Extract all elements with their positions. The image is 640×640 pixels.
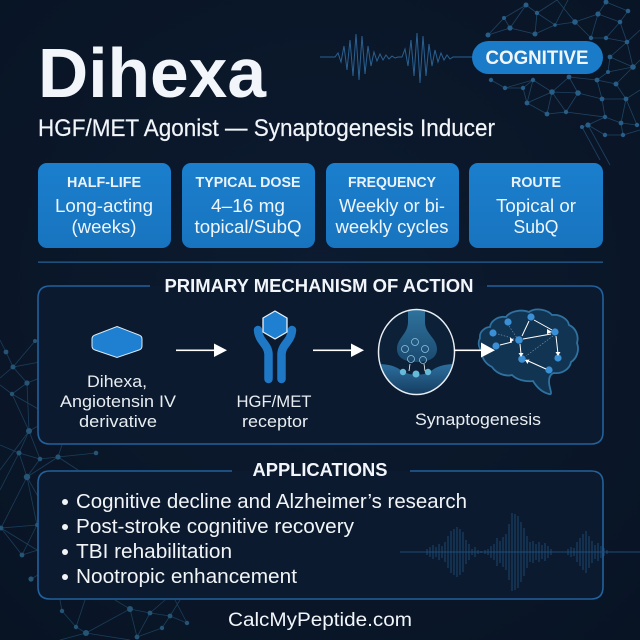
waveform: top <box>320 33 475 83</box>
icon: brain network <box>479 309 578 394</box>
title: Dihexa <box>38 34 267 112</box>
label: Dihexa <box>60 372 177 431</box>
card: route: SubQ <box>514 217 558 237</box>
card: half-life: Long-acting <box>55 196 153 216</box>
list: uses: TBI rehabilitation <box>76 541 232 563</box>
card: frequency <box>326 163 459 248</box>
list: uses: Nootropic enhancement <box>76 566 297 588</box>
card: frequency: Weekly or bi- <box>339 196 445 216</box>
footer: CalcMyPeptide.com <box>228 610 412 631</box>
panel: applications <box>38 460 640 599</box>
card: route: Topical or <box>496 196 576 216</box>
list: uses <box>62 491 467 588</box>
icon: HGF/MET receptor <box>258 311 292 379</box>
card: typical dose: topical/SubQ <box>194 217 302 237</box>
network: bottom left brain <box>0 339 189 640</box>
arrow: to brain <box>454 342 495 358</box>
card: route: ROUTE <box>511 175 561 191</box>
card: half-life: (weeks) <box>72 217 136 237</box>
card: frequency: FREQUENCY <box>348 175 436 191</box>
divider line <box>38 262 603 263</box>
icon: Dihexa hexagon <box>92 326 142 358</box>
list: uses: Cognitive decline and Alzheimer’s research <box>76 491 467 513</box>
list: uses: Post-stroke cognitive recovery <box>76 516 354 538</box>
heading: applications: APPLICATIONS <box>252 460 388 480</box>
label: receptor: receptor <box>242 412 308 431</box>
label: Dihexa: derivative <box>79 412 157 431</box>
label: synaptogenesis: Synaptogenesis <box>415 410 541 429</box>
waveform: bottom <box>400 513 640 591</box>
card: typical dose: 4–16 mg <box>211 196 285 216</box>
label: receptor: HGF/MET <box>236 392 312 411</box>
label: Dihexa: Angiotensin IV <box>60 392 177 411</box>
card: typical dose <box>182 163 315 248</box>
card: route <box>469 163 603 248</box>
card: frequency: weekly cycles <box>334 217 448 237</box>
label: Dihexa: Dihexa, <box>87 372 147 391</box>
network: top right brain <box>486 0 640 165</box>
icon: synapse <box>378 308 456 396</box>
subtitle: HGF/MET Agonist — Synaptogenesis Inducer <box>38 115 495 142</box>
arrow: to synapse <box>313 344 364 357</box>
card: half-life <box>38 163 171 248</box>
heading: primary mechanism: PRIMARY MECHANISM OF ACTION <box>164 276 474 296</box>
arrow: to receptor <box>176 344 227 357</box>
card: typical dose: TYPICAL DOSE <box>196 175 301 191</box>
panel: mechanism of action <box>38 276 603 444</box>
label: receptor <box>236 392 312 431</box>
badge: COGNITIVE: COGNITIVE <box>486 48 588 69</box>
badge: COGNITIVE <box>472 41 603 74</box>
card: half-life: HALF-LIFE <box>67 175 141 191</box>
